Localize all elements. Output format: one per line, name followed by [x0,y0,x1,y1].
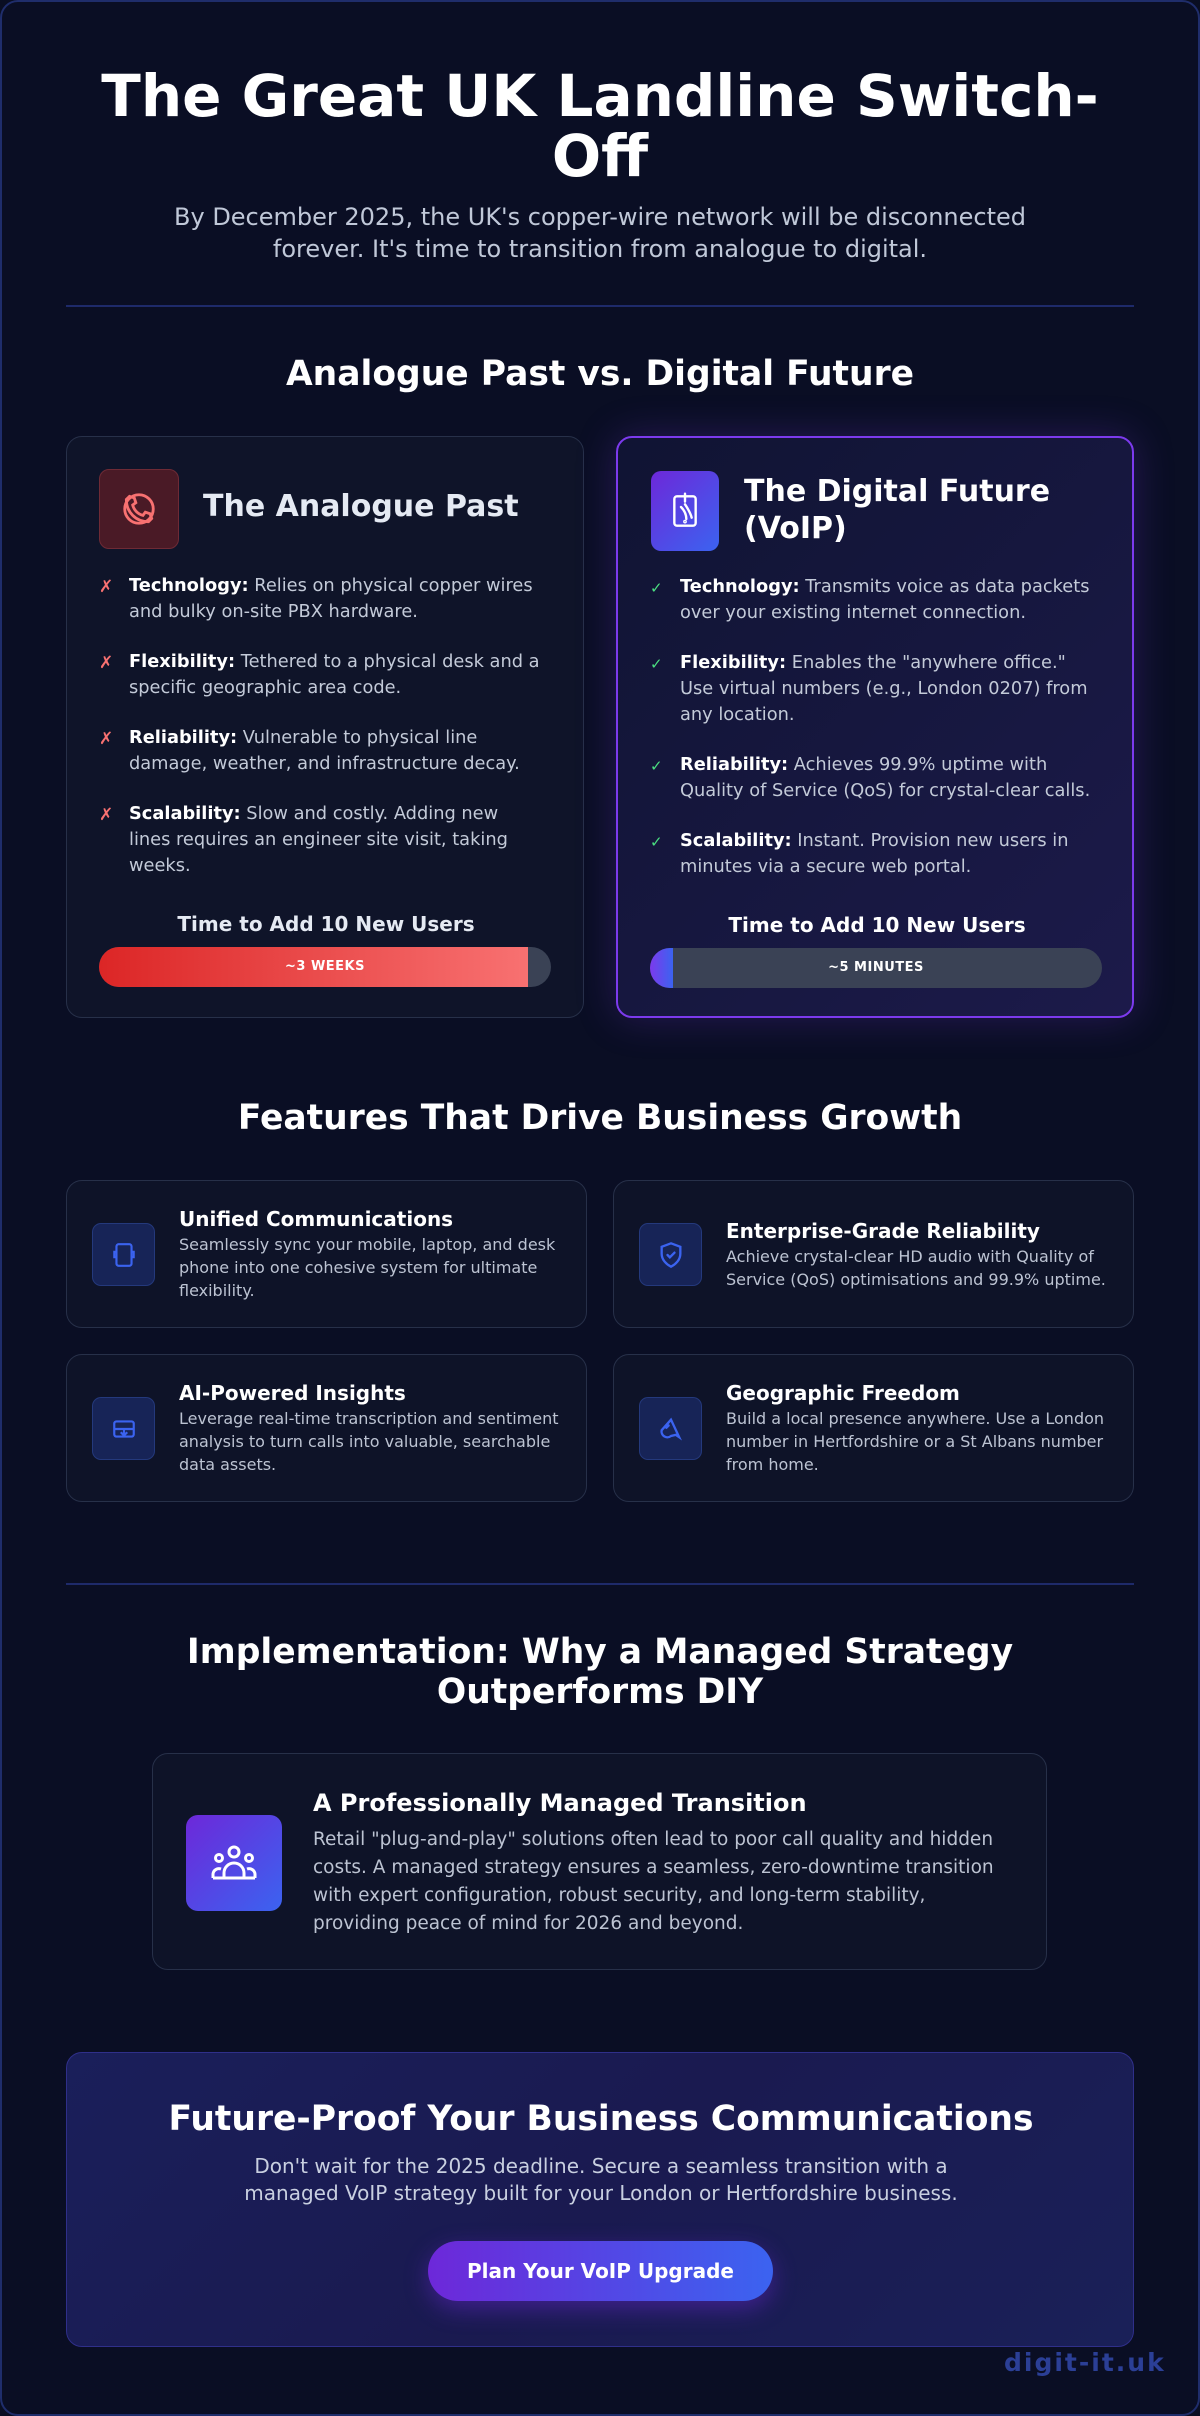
list: analogue drawbacks: Flexibility: Tethered to a physical desk and a specific geographic area code. [129,651,540,698]
subtitle: By December 2025, the UK's copper-wire network will be disconnected forever. It's time to transition from analogue to digital. [174,203,1026,263]
heading: implementation: Implementation: Why a Managed Strategy Outperforms DIY [187,1632,1013,1712]
bar chart: 3 weeks [99,947,551,987]
heading: comparison: Analogue Past vs. Digital Future [286,354,914,394]
button: plan upgrade [428,2241,773,2301]
list: digital benefits: ✓ [650,655,663,673]
text: unified communications: Unified Communications [179,1207,453,1231]
text: managed transition: Retail "plug-and-play" solutions often lead to poor call quality and hidden costs. A managed strategy ensures a seamless, zero-downtime transition with expert configuration, robust security, and long-term stability, providing peace of mind for 2026 and beyond. [313,1829,994,1934]
button: plan upgrade: Plan Your VoIP Upgrade [467,2259,734,2283]
bar chart: 3 weeks: ~3 WEEKS [285,959,365,974]
list: digital benefits: ✓ [650,757,663,775]
panel: AI insights [66,1354,587,1502]
list: analogue drawbacks: ✗ [99,805,113,825]
list: digital benefits: Technology: Transmits voice as data packets over your existing internet connection. [680,576,1089,623]
list: analogue drawbacks: ✗ [99,577,113,597]
panel: digital future [616,436,1134,1018]
list: analogue drawbacks [99,575,540,876]
footer: brand: digit-it.uk [1004,2348,1166,2377]
list: analogue drawbacks: Scalability: Slow and costly. Adding new lines requires an engineer site visit, taking weeks. [129,803,508,876]
text: unified communications: Seamlessly sync your mobile, laptop, and desk phone into one cohesive system for ultimate flexibility. [179,1235,555,1300]
text: enterprise reliability [726,1219,1106,1289]
text: AI insights: Leverage real-time transcription and sentiment analysis to turn calls into valuable, searchable data assets. [179,1409,558,1474]
panel: geographic freedom [613,1354,1134,1502]
icon: crossed phone [99,469,179,549]
title: The Great UK Landline Switch-Off [101,62,1099,190]
icon: shield [639,1223,702,1286]
icon: mobile phone [651,471,719,551]
icon: location [639,1397,702,1460]
text: managed transition: A Professionally Managed Transition [313,1789,807,1817]
list: analogue drawbacks: Reliability: Vulnerable to physical line damage, weather, and infrastructure decay. [129,727,520,774]
list: digital benefits: Flexibility: Enables the "anywhere office." Use virtual numbers (e.g., London 0207) from any location. [680,652,1088,725]
label: time to add users: Time to Add 10 New Users [728,913,1026,937]
bar chart: 5 minutes: ~5 MINUTES [828,960,924,975]
list: digital benefits: Scalability: Instant. Provision new users in minutes via a secure web portal. [680,830,1068,877]
panel: unified communications [66,1180,587,1328]
list: digital benefits: ✓ [650,833,663,851]
panel: managed transition [152,1753,1047,1970]
heading: features: Features That Drive Business Growth [238,1098,962,1138]
heading: analogue past: The Analogue Past [203,489,519,524]
panel: call to action [66,2052,1134,2347]
list: analogue drawbacks: ✗ [99,653,113,673]
heading: CTA: Future-Proof Your Business Communications [168,2099,1034,2139]
label: time to add users: Time to Add 10 New Users [177,912,475,936]
icon: devices [92,1223,155,1286]
list: analogue drawbacks: Technology: Relies on physical copper wires and bulky on-site PBX hardware. [129,575,533,622]
icon: inbox [92,1397,155,1460]
panel: enterprise reliability [613,1180,1134,1328]
list: digital benefits [650,576,1090,877]
list: digital benefits: ✓ [650,579,663,597]
bar chart: 5 minutes [650,948,1102,988]
text: enterprise reliability: Achieve crystal-clear HD audio with Quality of Service (QoS) optimisations and 99.9% uptime. [726,1247,1106,1289]
text: geographic freedom: Build a local presence anywhere. Use a London number in Hertfordshire or a St Albans number from home. [726,1409,1104,1474]
text: geographic freedom [726,1381,1104,1474]
panel: analogue past [66,436,584,1018]
text: AI insights [179,1381,558,1474]
text: AI insights: AI-Powered Insights [179,1381,406,1405]
text: geographic freedom: Geographic Freedom [726,1381,960,1405]
text: CTA description: Don't wait for the 2025 deadline. Secure a seamless transition with a managed VoIP strategy built for your London or Hertfordshire business. [244,2154,958,2205]
list: analogue drawbacks: ✗ [99,729,113,749]
list: digital benefits: Reliability: Achieves 99.9% uptime with Quality of Service (QoS) for crystal-clear calls. [680,754,1090,801]
icon: team [186,1815,282,1911]
text: unified communications [179,1207,556,1300]
text: enterprise reliability: Enterprise-Grade Reliability [726,1219,1040,1243]
heading: digital future: The Digital Future (VoIP) [744,474,1050,546]
